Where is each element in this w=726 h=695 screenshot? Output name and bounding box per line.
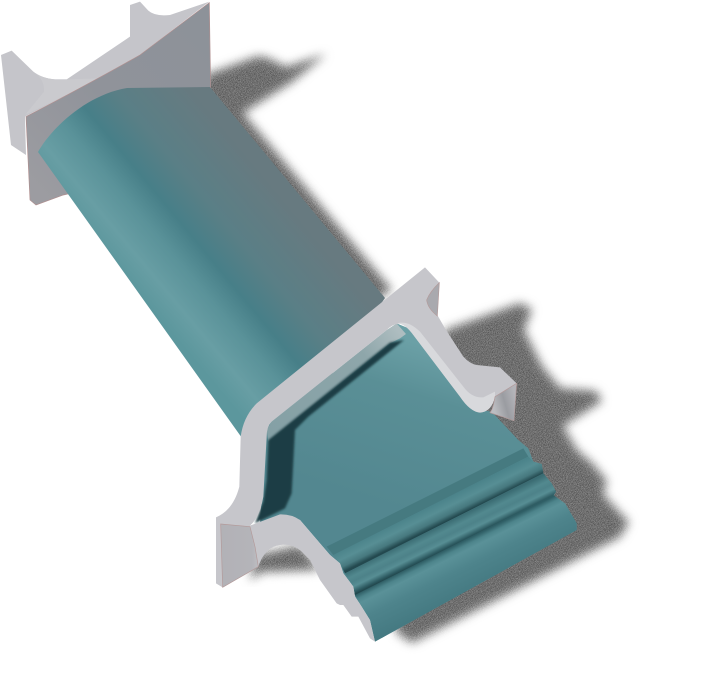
far end face — [490, 383, 517, 421]
lower blade section — [216, 267, 577, 642]
left end face — [221, 524, 258, 587]
ridge band one — [333, 457, 543, 573]
cast shadow: upper — [200, 54, 392, 320]
platform underside face — [26, 3, 211, 205]
flat ridge band — [327, 448, 528, 555]
platform left and top faces — [1, 2, 209, 155]
ridge band two — [345, 473, 556, 596]
right end face — [427, 283, 439, 316]
cast shadow: under left platform — [250, 545, 320, 580]
dark shadow under flange — [255, 340, 404, 523]
ridge band three — [355, 495, 577, 642]
platform top surface — [216, 267, 517, 642]
top platform — [1, 2, 211, 205]
cast shadow: lower — [380, 303, 629, 643]
lit inner fillet — [397, 323, 495, 413]
platform lit fillet — [25, 72, 100, 115]
flange inner wall — [267, 323, 406, 442]
lower blade surface — [260, 323, 577, 642]
blade main body — [38, 87, 385, 438]
